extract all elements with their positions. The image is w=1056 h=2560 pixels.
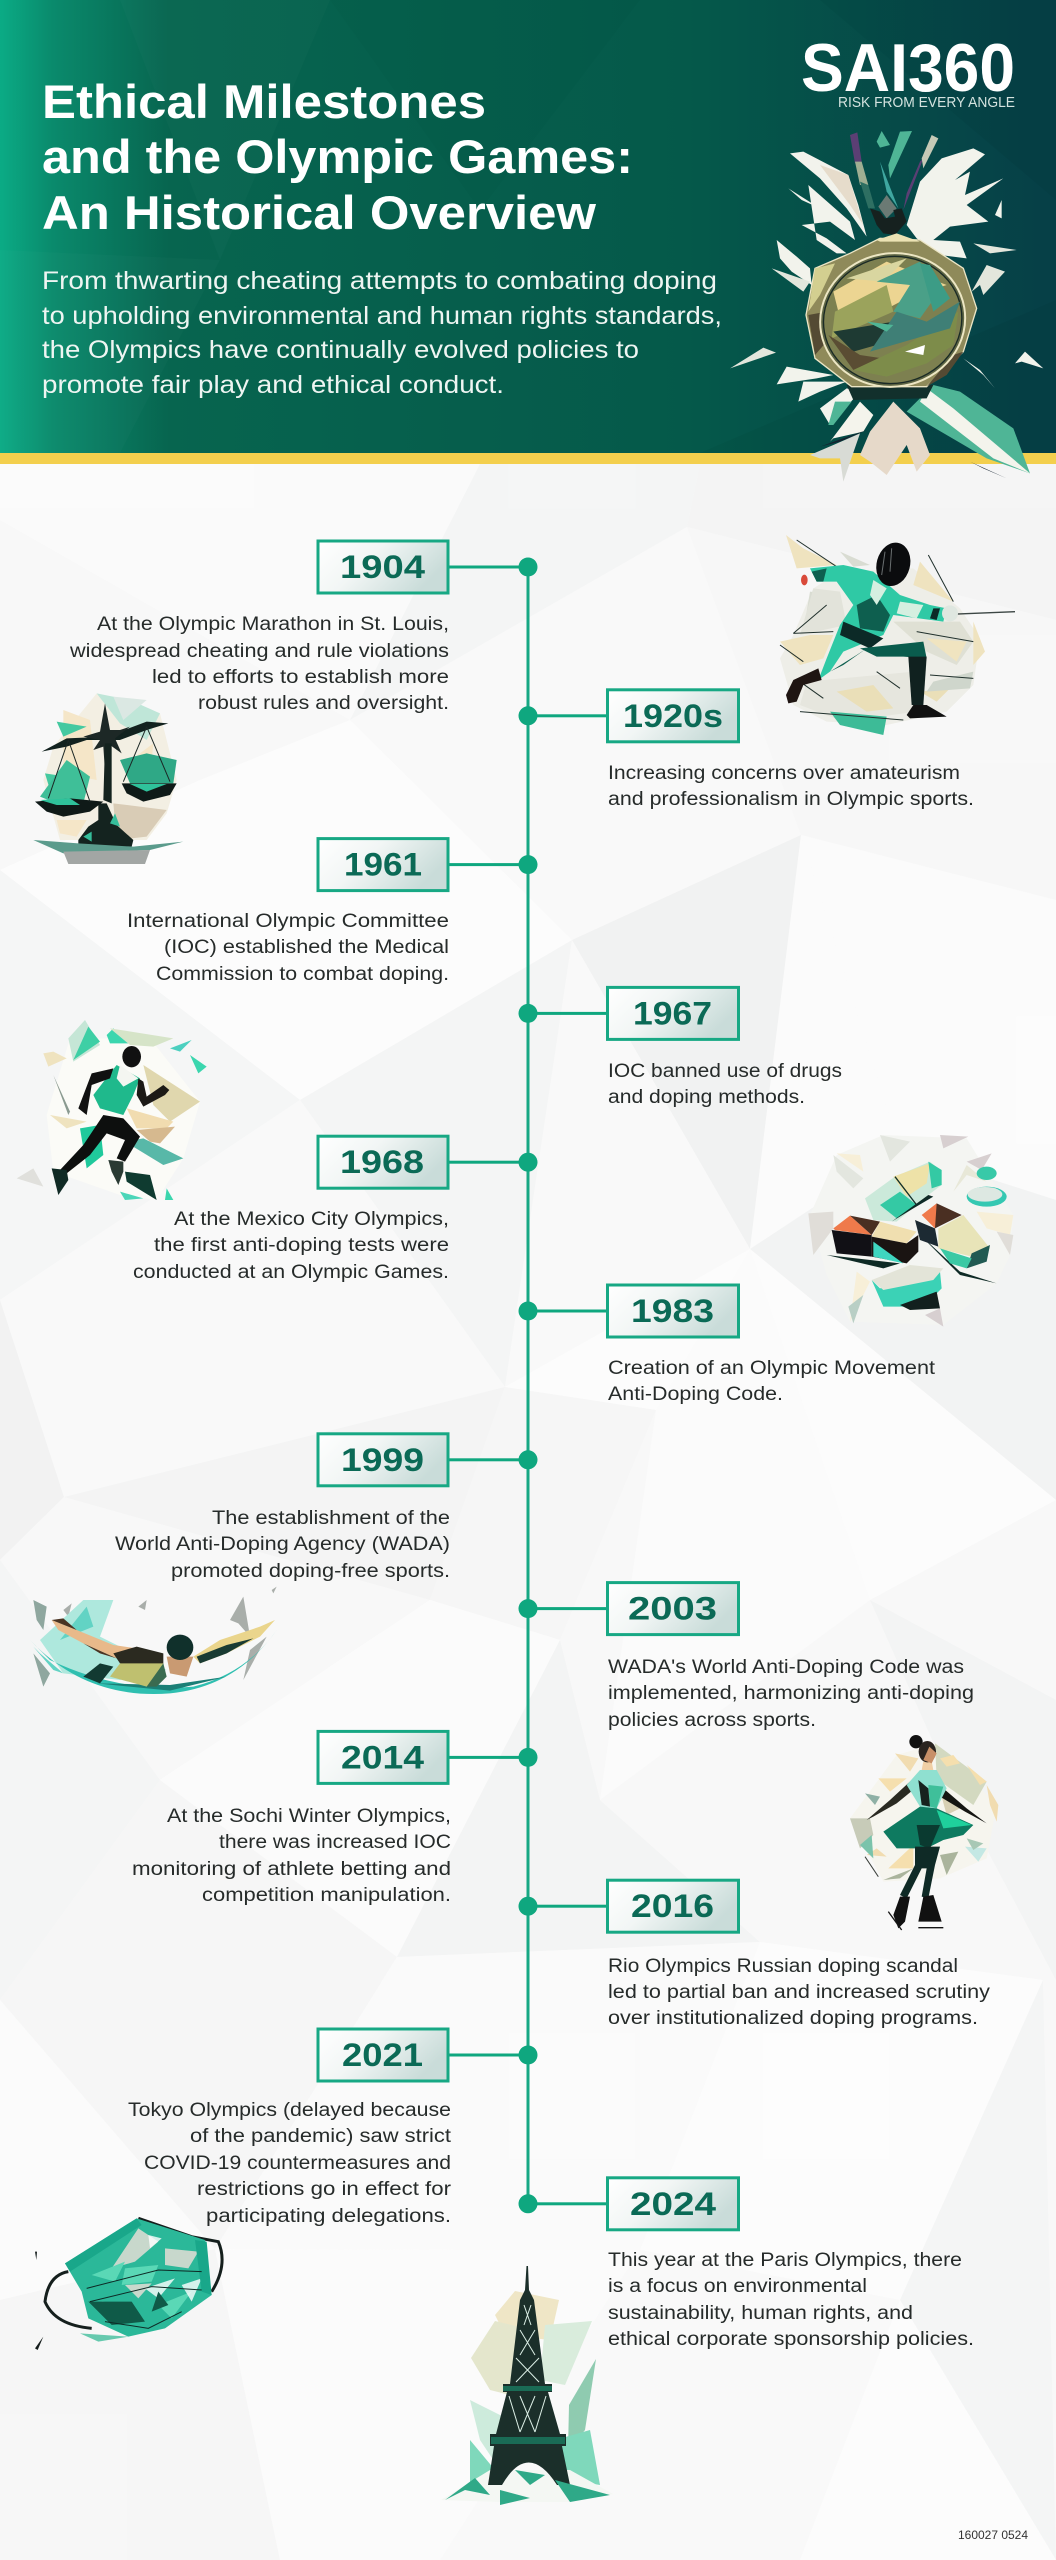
description: restrictions go in effect for (197, 2179, 452, 2200)
logo: SAI360: RISK FROM EVERY ANGLE (838, 94, 1015, 111)
description: International Olympic Committee (127, 911, 449, 932)
icon: fencer (780, 535, 1015, 735)
year box (318, 541, 448, 593)
year box (608, 690, 738, 742)
timeline spine (526, 567, 530, 2204)
description: of the pandemic) saw strict (190, 2126, 452, 2147)
description (69, 614, 449, 714)
description: participating delegations. (206, 2206, 451, 2227)
description: Increasing concerns over amateurism (608, 763, 960, 784)
icon: runner (17, 1020, 207, 1200)
milestone 1999 (115, 1434, 538, 1582)
description: promoted doping-free sports. (171, 1561, 450, 1582)
year box: 1904 (340, 549, 425, 585)
year box: 1961 (344, 847, 422, 883)
connector and dot (449, 2046, 538, 2064)
intro paragraph: the Olympics have continually evolved policies to (42, 336, 639, 364)
description: Commission to combat doping. (156, 964, 449, 985)
description: At the Mexico City Olympics, (174, 1209, 449, 1230)
connector and dot (449, 855, 538, 874)
description: is a focus on environmental (608, 2276, 867, 2297)
year box (318, 839, 448, 891)
milestone 2024 (518, 2178, 974, 2350)
year box: 2014 (341, 1739, 424, 1775)
milestone 1968 (133, 1136, 538, 1283)
connector and dot (518, 706, 606, 725)
description: sustainability, human rights, and (608, 2303, 913, 2324)
icon: Eiffel Tower (441, 2266, 613, 2505)
description: Anti-Doping Code. (608, 1384, 783, 1405)
description (608, 763, 974, 810)
connector and dot (518, 1004, 606, 1023)
year box: 2016 (631, 1888, 714, 1924)
description: monitoring of athlete betting and (132, 1859, 451, 1880)
description: the first anti-doping tests were (154, 1235, 449, 1256)
year box: 2024 (630, 2186, 716, 2222)
milestone 2021 (128, 2029, 538, 2227)
icon: scales of justice (33, 693, 183, 864)
milestone 2014 (132, 1731, 538, 1906)
description: widespread cheating and rule violations (69, 641, 449, 662)
connector and dot (518, 2194, 606, 2213)
description: IOC banned use of drugs (608, 1061, 842, 1082)
icon: face mask (35, 2218, 222, 2350)
title: and the Olympic Games: (42, 130, 633, 183)
description: At the Olympic Marathon in St. Louis, (97, 614, 449, 635)
icon: swimmer (30, 1587, 277, 1694)
title: Ethical Milestones (42, 75, 486, 128)
connector and dot (518, 1302, 606, 1320)
description: led to efforts to establish more (152, 667, 449, 688)
description: conducted at an Olympic Games. (133, 1262, 449, 1283)
description: COVID-19 countermeasures and (144, 2153, 451, 2174)
description (608, 1358, 936, 1405)
description: and doping methods. (608, 1087, 805, 1108)
description: World Anti-Doping Agency (WADA) (115, 1534, 450, 1555)
year box: 1920s (623, 698, 723, 734)
year box (608, 987, 738, 1039)
year box: 1983 (631, 1293, 714, 1329)
year box (608, 1285, 738, 1337)
description: The establishment of the (212, 1508, 450, 1529)
description: and professionalism in Olympic sports. (608, 789, 974, 810)
year box (608, 2178, 738, 2230)
description: (IOC) established the Medical (164, 937, 449, 958)
milestone 2003 (518, 1583, 974, 1731)
connector and dot (518, 1897, 606, 1916)
description (133, 1209, 449, 1283)
milestone 1961 (127, 839, 538, 985)
description: This year at the Paris Olympics, there (608, 2250, 962, 2271)
milestone 2016 (518, 1880, 991, 2029)
year box (318, 1731, 448, 1783)
title (42, 75, 633, 239)
description (608, 1061, 842, 1108)
description: over institutionalized doping programs. (608, 2008, 978, 2029)
year box: 2021 (342, 2037, 423, 2073)
year box (608, 1880, 738, 1932)
year box: 2003 (628, 1591, 717, 1627)
description: WADA's World Anti-Doping Code was (608, 1657, 964, 1678)
description (132, 1806, 451, 1906)
description: robust rules and oversight. (198, 693, 449, 714)
description: Creation of an Olympic Movement (608, 1358, 936, 1379)
connector and dot (449, 1748, 538, 1767)
intro paragraph (42, 267, 722, 399)
connector and dot (518, 1599, 606, 1618)
description (608, 1956, 991, 2029)
description (608, 1657, 974, 1731)
description: policies across sports. (608, 1710, 816, 1731)
milestone 1967 (518, 987, 842, 1108)
panel: header (0, 0, 1056, 464)
year box (318, 1136, 448, 1188)
icon: shattered medal (730, 131, 1043, 482)
description: implemented, harmonizing anti-doping (608, 1683, 974, 1704)
description (127, 911, 449, 985)
milestone 1904 (69, 541, 538, 714)
year box (318, 2029, 448, 2081)
footer code: 160027 0524 (958, 2528, 1028, 2542)
header accent bar (0, 453, 1056, 464)
milestone 1920s (518, 690, 974, 810)
intro paragraph: promote fair play and ethical conduct. (42, 371, 504, 399)
title: An Historical Overview (42, 186, 596, 239)
description: led to partial ban and increased scrutiny (608, 1982, 991, 2003)
description: competition manipulation. (202, 1885, 451, 1906)
year box: 1967 (633, 995, 712, 1031)
description: Rio Olympics Russian doping scandal (608, 1956, 958, 1977)
connector and dot (449, 558, 538, 576)
description (608, 2250, 974, 2350)
year box: 1999 (341, 1442, 424, 1478)
year box (608, 1583, 738, 1635)
year box (318, 1434, 448, 1486)
connector and dot (449, 1450, 538, 1469)
icon: pills (808, 1135, 1013, 1327)
description: Tokyo Olympics (delayed because (128, 2100, 451, 2121)
description (115, 1508, 450, 1582)
intro paragraph: From thwarting cheating attempts to combating doping (42, 267, 717, 295)
year box: 1968 (340, 1144, 424, 1180)
connector and dot (449, 1153, 538, 1172)
intro paragraph: to upholding environmental and human rights standards, (42, 302, 722, 330)
logo: SAI360: SAI360 (801, 30, 1015, 106)
milestone 1983 (518, 1285, 936, 1405)
description: At the Sochi Winter Olympics, (167, 1806, 451, 1827)
description (128, 2100, 452, 2227)
icon: figure skater (850, 1735, 998, 1930)
description: there was increased IOC (219, 1832, 451, 1853)
description: ethical corporate sponsorship policies. (608, 2329, 974, 2350)
